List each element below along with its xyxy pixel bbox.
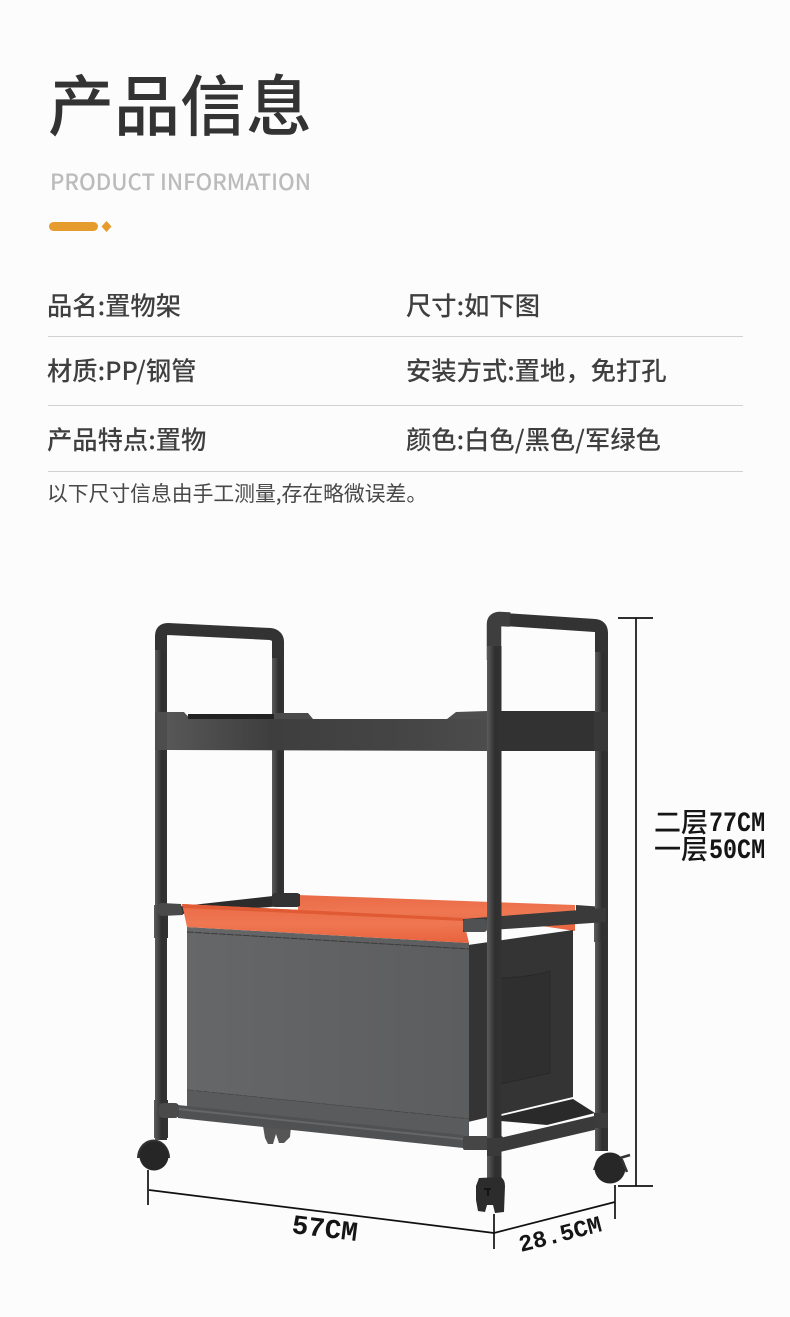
- height label: tier one: 一层: [654, 828, 708, 867]
- left rear-post: [154, 650, 179, 1140]
- width dimension: [148, 1170, 615, 1260]
- fabric sling bottom: [187, 1090, 469, 1140]
- subtitle: PRODUCT INFORMATION: [50, 165, 311, 197]
- height dimension: [618, 618, 765, 1186]
- accent: orange bar and diamond: [49, 221, 112, 232]
- spec: name: 品名:置物架: [47, 287, 181, 323]
- note: 以下尺寸信息由手工测量,存在略微误差。: [47, 477, 427, 507]
- right caster: [593, 1152, 630, 1184]
- front caster: [476, 1177, 505, 1213]
- spec: material: 材质:PP/钢管: [47, 352, 196, 388]
- depth label: 28.5CM: [516, 1212, 605, 1260]
- front orange band: [182, 904, 469, 943]
- height label: tier one: 50CM: [709, 835, 765, 867]
- right rear-post and top handle: [497, 619, 608, 1151]
- fabric bin: front panel: [187, 927, 469, 1122]
- left caster: [137, 1140, 170, 1170]
- product illustration: storage cart: [137, 619, 630, 1213]
- middle rear frame: [165, 893, 604, 916]
- spec: installation: 安装方式:置地，免打孔: [406, 352, 667, 388]
- middle side tube: [463, 908, 606, 932]
- height label: tier one: [654, 828, 765, 867]
- width label: 57CM: [290, 1211, 359, 1250]
- height label: tier two: 77CM: [709, 808, 765, 840]
- fabric bin: side pocket: [501, 971, 550, 1084]
- spec: size: 尺寸:如下图: [406, 287, 540, 323]
- top shelf: [155, 711, 608, 751]
- bottom front tube: [178, 1105, 503, 1150]
- rear caster: [263, 1126, 291, 1144]
- header: [48, 54, 312, 232]
- rear orange band: [298, 895, 575, 931]
- spec: colours: 颜色:白色/黑色/军绿色: [406, 421, 661, 457]
- bottom side tube: [500, 1113, 607, 1152]
- panel: product specification table: [47, 287, 743, 507]
- front post: [487, 619, 510, 1181]
- height label: tier two: 二层: [654, 801, 708, 840]
- title: 产品信息: [48, 54, 312, 150]
- fabric bin: bottom floor: [501, 1099, 595, 1125]
- height label: tier two: [654, 801, 765, 840]
- rear left handle: [161, 629, 284, 900]
- fabric bin: side panel: [468, 930, 573, 1122]
- width dimension lines: [148, 1170, 615, 1249]
- height dimension line: [618, 618, 653, 1186]
- spec: feature: 产品特点:置物: [47, 421, 206, 457]
- fabric seams: [187, 932, 469, 1119]
